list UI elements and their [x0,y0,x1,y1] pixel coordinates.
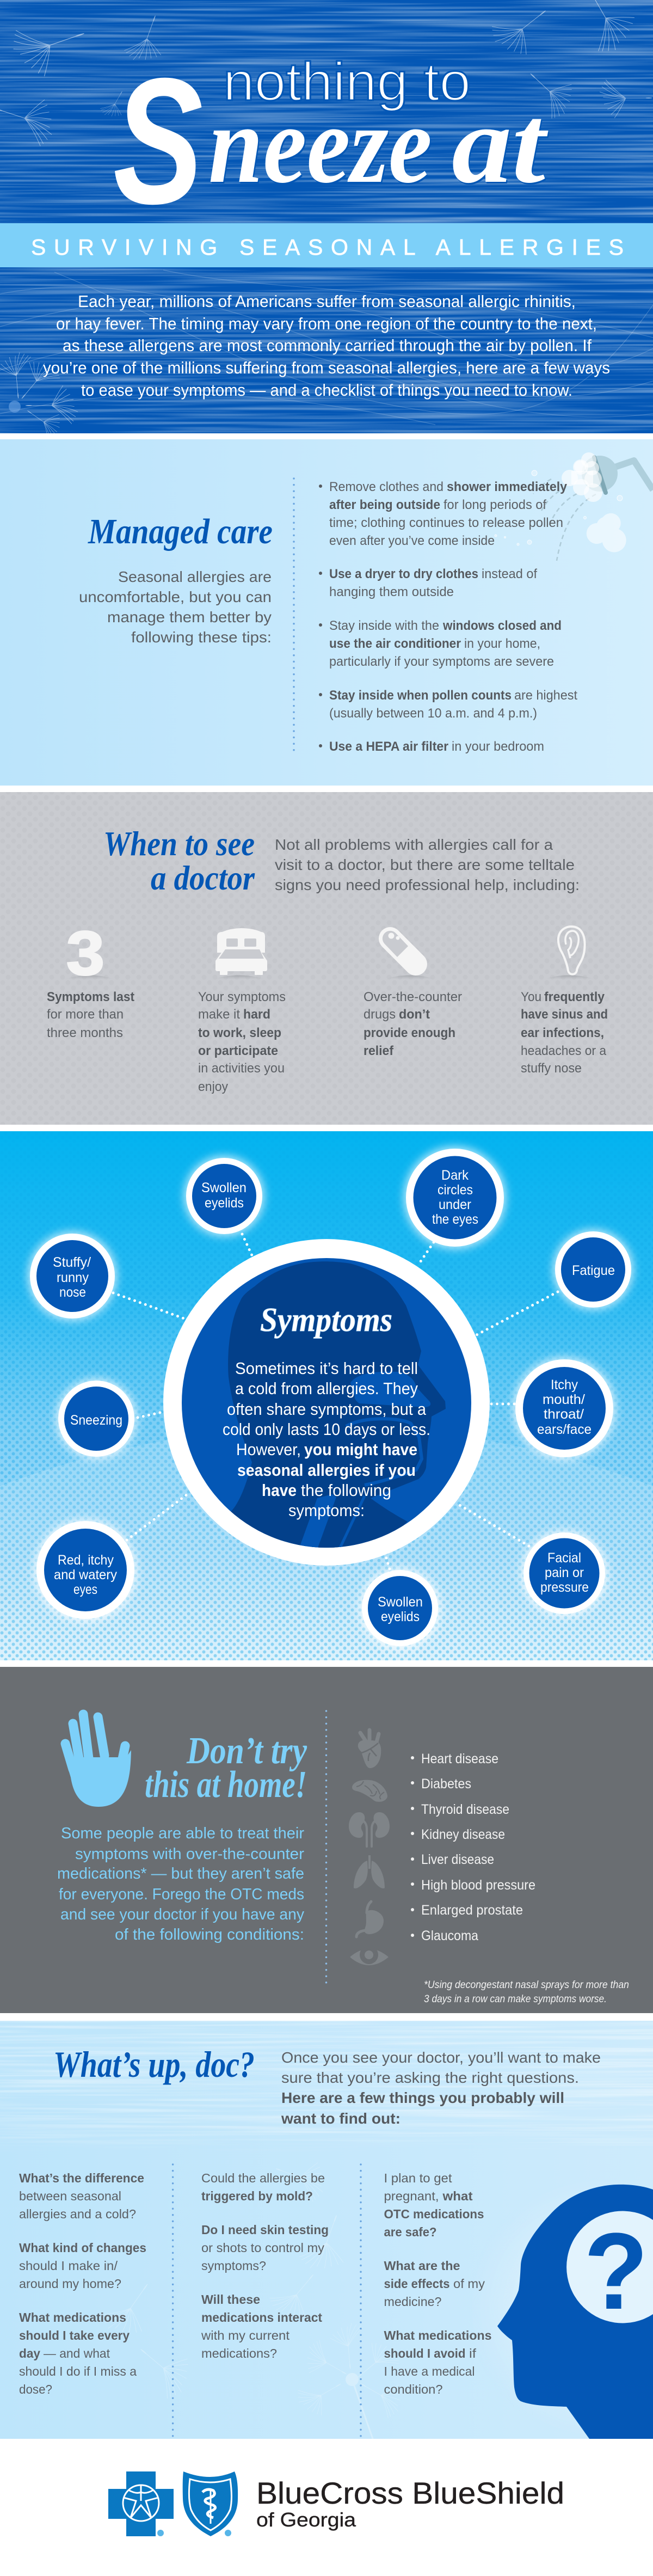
question column 1: should I do if I miss a [19,2364,137,2378]
symptom: itchy: mouth/ [543,1392,585,1407]
head glow [468,2178,653,2439]
bullet list of tips: Use a HEPA air filter [329,739,448,754]
heading: symptoms: Symptoms [260,1302,392,1339]
intro text: as these allergens are most commonly carried through the air by pollen. If [63,336,592,355]
symptom: red itchy eyes [34,1519,137,1621]
conditions list: Enlarged prostate [421,1903,523,1918]
intro text: manage them better by [107,609,272,625]
subtitle band: SURVIVING SEASONAL ALLERGIES [31,235,624,260]
intro text: Not all problems with allergies call for a [275,836,553,853]
symptom: dark circles: the eyes [432,1212,478,1227]
text: hard to work: hard [243,1007,270,1022]
text: symptoms intro: However, [236,1440,301,1459]
intro text: or hay fever. The timing may vary from one region of the country to the next, [56,314,597,333]
logo subtext: of Georgia [256,2508,356,2531]
panel: what's up, doc [0,2021,653,2439]
symptom: fatigue: Fatigue [572,1263,615,1278]
symptom: facial pain [521,1530,607,1616]
icon: blue shield [183,2471,238,2536]
intro text [43,292,610,400]
warning text: medications* — but they aren’t safe [57,1865,304,1882]
question column 3: side effects [384,2277,449,2291]
text: symptoms intro: Sometimes it’s hard to tell [235,1359,418,1378]
symptom: itchy: Itchy [551,1377,578,1393]
panel: don't try this at home [0,1667,653,2013]
warning text: symptoms with over-the-counter [75,1845,304,1863]
question column 1: should I take every [19,2328,130,2342]
symptom: itchy: ears/face [537,1422,592,1437]
bullet list of tips: shower immediately [447,480,568,494]
title: Sneeze at [113,40,550,241]
intro text: visit to a doctor, but there are some telltale [275,856,575,873]
panel: header [0,0,653,444]
footnote: *Using decongestant nasal sprays for more than [424,1979,629,1991]
intro text [79,568,272,646]
icon: lungs [354,1855,385,1888]
symptom: facial pain: pressure [540,1580,589,1595]
intro text: uncomfortable, but you can [79,588,272,605]
text: symptoms intro: often share symptoms, but a [227,1400,427,1419]
icon: stomach [356,1902,384,1937]
logo wordmark: BlueCross BlueShield [256,2476,564,2510]
text: frequent infections [521,990,608,1076]
panel: when to see a doctor [0,792,653,1125]
text: otc drugs: don’t [399,1007,430,1022]
bullet list of tips: use the air conditioner [329,636,461,651]
text: symptoms intro: have [262,1481,297,1500]
question column 2: or shots to control my [201,2241,325,2255]
text: otc drugs: Over-the-counter [364,990,462,1004]
icon: hand [61,1714,131,1807]
bullet list of tips [319,480,577,754]
text: frequent infections: You [521,990,541,1004]
intro text: Seasonal allergies are [118,568,272,585]
text: hard to work: in activities you [198,1061,285,1076]
text: symptoms intro: cold only lasts 10 days or less. [223,1420,430,1439]
text: symptoms intro: a cold from allergies. They [235,1379,418,1398]
icon: shower head [495,452,653,561]
question column 2: with my current [201,2328,290,2342]
icon: brain [352,1780,387,1802]
bullet list of tips: after being outside [329,498,440,512]
question column 2: Will these [201,2292,260,2307]
question column 3: OTC medications [384,2207,484,2221]
symptom: dark circles: Dark [441,1168,469,1183]
question column 1: allergies and a cold? [19,2207,136,2221]
text: hard to work: Your symptoms [198,990,286,1004]
question column 3: pregnant, [384,2189,439,2203]
intro text: Each year, millions of Americans suffer from seasonal allergic rhinitis, [78,292,576,311]
symptom: itchy: throat/ [544,1407,584,1422]
question column 2: Do I need skin testing [201,2223,329,2237]
conditions list: Thyroid disease [421,1802,509,1817]
symptom: swollen eyelids top [184,1156,264,1236]
question column 2 [201,2171,329,2360]
bullet list of tips: hanging them outside [329,585,454,599]
conditions list: Diabetes [421,1776,471,1792]
heading: when to see a doctor: a doctor [151,858,255,897]
bullet list of tips: Stay inside when pollen counts [329,688,512,703]
question column 3: of my [453,2277,485,2291]
text: hard to work [198,990,286,1094]
connectors [113,1234,558,1569]
intro text: to ease your symptoms — and a checklist of things you need to know. [81,381,572,400]
intro text: Here are a few things you probably will [281,2089,564,2106]
bullet list of tips: are highest [514,688,577,703]
text: otc drugs: drugs [364,1007,396,1022]
symptom: swollen eyelids bottom [360,1568,440,1648]
question column 2: medications? [201,2346,277,2360]
symptom: stuffy nose [28,1231,117,1321]
bullet list of tips: Remove clothes and [329,480,443,494]
icon: ear [558,927,585,974]
title: Sneeze at: neeze [210,84,433,208]
intro text: signs you need professional help, including: [275,876,580,893]
text: symptoms last: for more than [47,1007,124,1022]
symptom: facial pain: pain or [545,1565,584,1580]
text: hard to work: make it [198,1007,240,1022]
icon: eye [350,1946,389,1965]
icon shadows [58,976,602,982]
title: Sneeze at: at [452,83,549,206]
text: symptoms last: Symptoms last [47,990,134,1004]
question column 3: What are the [384,2259,460,2273]
heading: when to see a doctor [103,824,255,897]
symptom: dark circles: under [439,1197,471,1212]
text: frequent infections: ear infections, [521,1026,604,1040]
symptom: stuffy nose: runny [57,1270,89,1285]
warning text: and see your doctor if you have any [60,1906,304,1923]
icon: pill [383,931,416,964]
text: frequent infections: have sinus and [521,1007,608,1022]
question column 1: around my home? [19,2277,121,2291]
bullet list of tips: even after you’ve come inside [329,533,495,548]
text: symptoms intro: symptoms: [288,1501,365,1520]
question column 1: should I make in/ [19,2259,118,2273]
conditions list: Kidney disease [421,1827,505,1842]
question column 1: — and what [44,2346,110,2360]
bullet list of tips: time; clothing continues to release pollen [329,516,563,530]
bullet list of tips: windows closed and [442,618,562,633]
text: symptoms last [47,990,134,1040]
heading: don't try this at home [145,1730,307,1806]
text: otc drugs: relief [364,1044,394,1058]
central circle [163,1239,490,1566]
symptom: facial pain: Facial [547,1550,581,1566]
intro text [281,2049,601,2127]
symptom: itchy [513,1357,615,1459]
question column 2: symptoms? [201,2259,266,2273]
title: nothing to: nothing to [223,51,471,112]
panel: managed care [0,439,653,786]
intro text: you’re one of the millions suffering from seasonal allergies, here are a few ways [43,358,610,377]
symptom: fatigue [553,1229,633,1310]
bullet list of tips: particularly if your symptoms are severe [329,654,554,669]
symptom: red itchy eyes: eyes [73,1582,97,1597]
heading: managed care: Managed care [88,512,273,551]
question column 3 [384,2171,492,2396]
icon: heart [358,1730,381,1768]
question column 3: what [442,2189,473,2203]
bullet list of tips: (usually between 10 a.m. and 4 p.m.) [329,706,537,721]
symptom: stuffy nose: nose [59,1285,86,1300]
bullet list of tips: in your bedroom [452,739,544,754]
bullet list of tips: in your home, [464,636,540,651]
symptom: red itchy eyes: and watery [54,1567,117,1583]
symptom: dark circles [404,1146,506,1249]
question column 2: triggered by mold? [201,2189,313,2203]
conditions list [411,1751,535,1943]
question column 1 [19,2171,146,2396]
heading: what's up doc: What’s up, doc? [53,2044,255,2085]
text: frequent infections: stuffy nose [521,1061,582,1076]
intro text: following these tips: [131,629,272,646]
footer: logo [108,2471,564,2536]
bullet list of tips: Stay inside with the [329,618,439,633]
bullet list of tips: Use a dryer to dry clothes [329,567,478,581]
question column 1: What’s the difference [19,2171,144,2185]
text: hard to work: to work, sleep [198,1026,281,1040]
intro text: Once you see your doctor, you’ll want to make [281,2049,601,2066]
symptom: stuffy nose: Stuffy/ [53,1255,91,1270]
text: symptoms intro: you might have [304,1440,417,1459]
conditions list: Glaucoma [421,1928,478,1943]
text: symptoms intro [223,1359,430,1520]
footnote: 3 days in a row can make symptoms worse. [424,1994,607,2005]
faint dandelion seeds [97,2150,409,2439]
text: frequent infections: headaches or a [521,1044,607,1058]
question column 3: should I avoid [384,2346,466,2360]
conditions list: Liver disease [421,1852,494,1867]
icon: head with question mark [497,2185,653,2439]
bullet list of tips: for long periods of [443,498,546,512]
symptom: swollen eyelids top: Swollen [201,1180,247,1195]
warning text: Some people are able to treat their [61,1825,304,1842]
symptom: dark circles: circles [438,1182,473,1198]
warning text: of the following conditions: [115,1926,304,1943]
panel: symptoms [0,1131,653,1660]
symptom: swollen eyelids bottom: Swollen [378,1594,423,1610]
symptom: red itchy eyes: Red, itchy [58,1553,114,1568]
text: symptoms intro: seasonal allergies if you [237,1461,416,1480]
symptom: sneezing [56,1378,137,1459]
question column 3: condition? [384,2382,443,2396]
icon: number 3: 3 [66,919,104,988]
question column 1: dose? [19,2382,52,2396]
title: Sneeze at: neeze [208,83,432,206]
text: symptoms last: three months [47,1026,123,1040]
icon: bed [215,928,267,975]
heading: don't try this at home: Don’t try [186,1730,307,1772]
text: hard to work: enjoy [198,1080,228,1094]
symptom: sneezing: Sneezing [70,1413,122,1428]
text: symptoms intro: the following [301,1481,391,1500]
warning text [57,1825,304,1943]
text: hard to work: or participate [198,1044,278,1058]
question column 1: between seasonal [19,2189,121,2203]
intro text: sure that you’re asking the right questions. [281,2069,579,2086]
symptom: swollen eyelids bottom: eyelids [381,1609,420,1624]
question column 3: I plan to get [384,2171,452,2185]
heading: don't try this at home: this at home! [145,1764,307,1806]
symptom: swollen eyelids top: eyelids [205,1195,244,1211]
icon: head with question mark: ? [584,2211,648,2332]
organ icons [349,1730,390,1965]
subtitle band [0,223,653,267]
question column 3: I have a medical [384,2364,475,2378]
heading: when to see a doctor: When to see [103,824,255,863]
title: Sneeze at: S [113,40,204,241]
question column 3: What medications [384,2328,492,2342]
intro text [275,836,580,893]
text: frequent infections: frequently [544,990,605,1004]
big dandelion [0,352,78,444]
question column 1: What medications [19,2310,126,2324]
question column 2: Could the allergies be [201,2171,325,2185]
bullet list of tips: instead of [482,567,537,581]
conditions list: Heart disease [421,1751,498,1767]
icon: kidneys [349,1812,390,1847]
title: Sneeze at: at [453,84,550,208]
head silhouette [228,1261,446,1548]
question column 2: medications interact [201,2310,322,2324]
question column 1: day [19,2346,40,2360]
footnote [424,1979,629,2005]
question column 3: if [469,2346,477,2360]
icon: blue cross [108,2471,174,2536]
conditions list: High blood pressure [421,1878,535,1893]
warning text: for everyone. Forego the OTC meds [59,1886,304,1903]
text: otc drugs [364,990,462,1058]
question column 1: What kind of changes [19,2241,146,2255]
intro text: want to find out: [281,2110,401,2127]
text: otc drugs: provide enough [364,1026,455,1040]
question column 3: are safe? [384,2225,436,2239]
question column 3: medicine? [384,2295,442,2309]
